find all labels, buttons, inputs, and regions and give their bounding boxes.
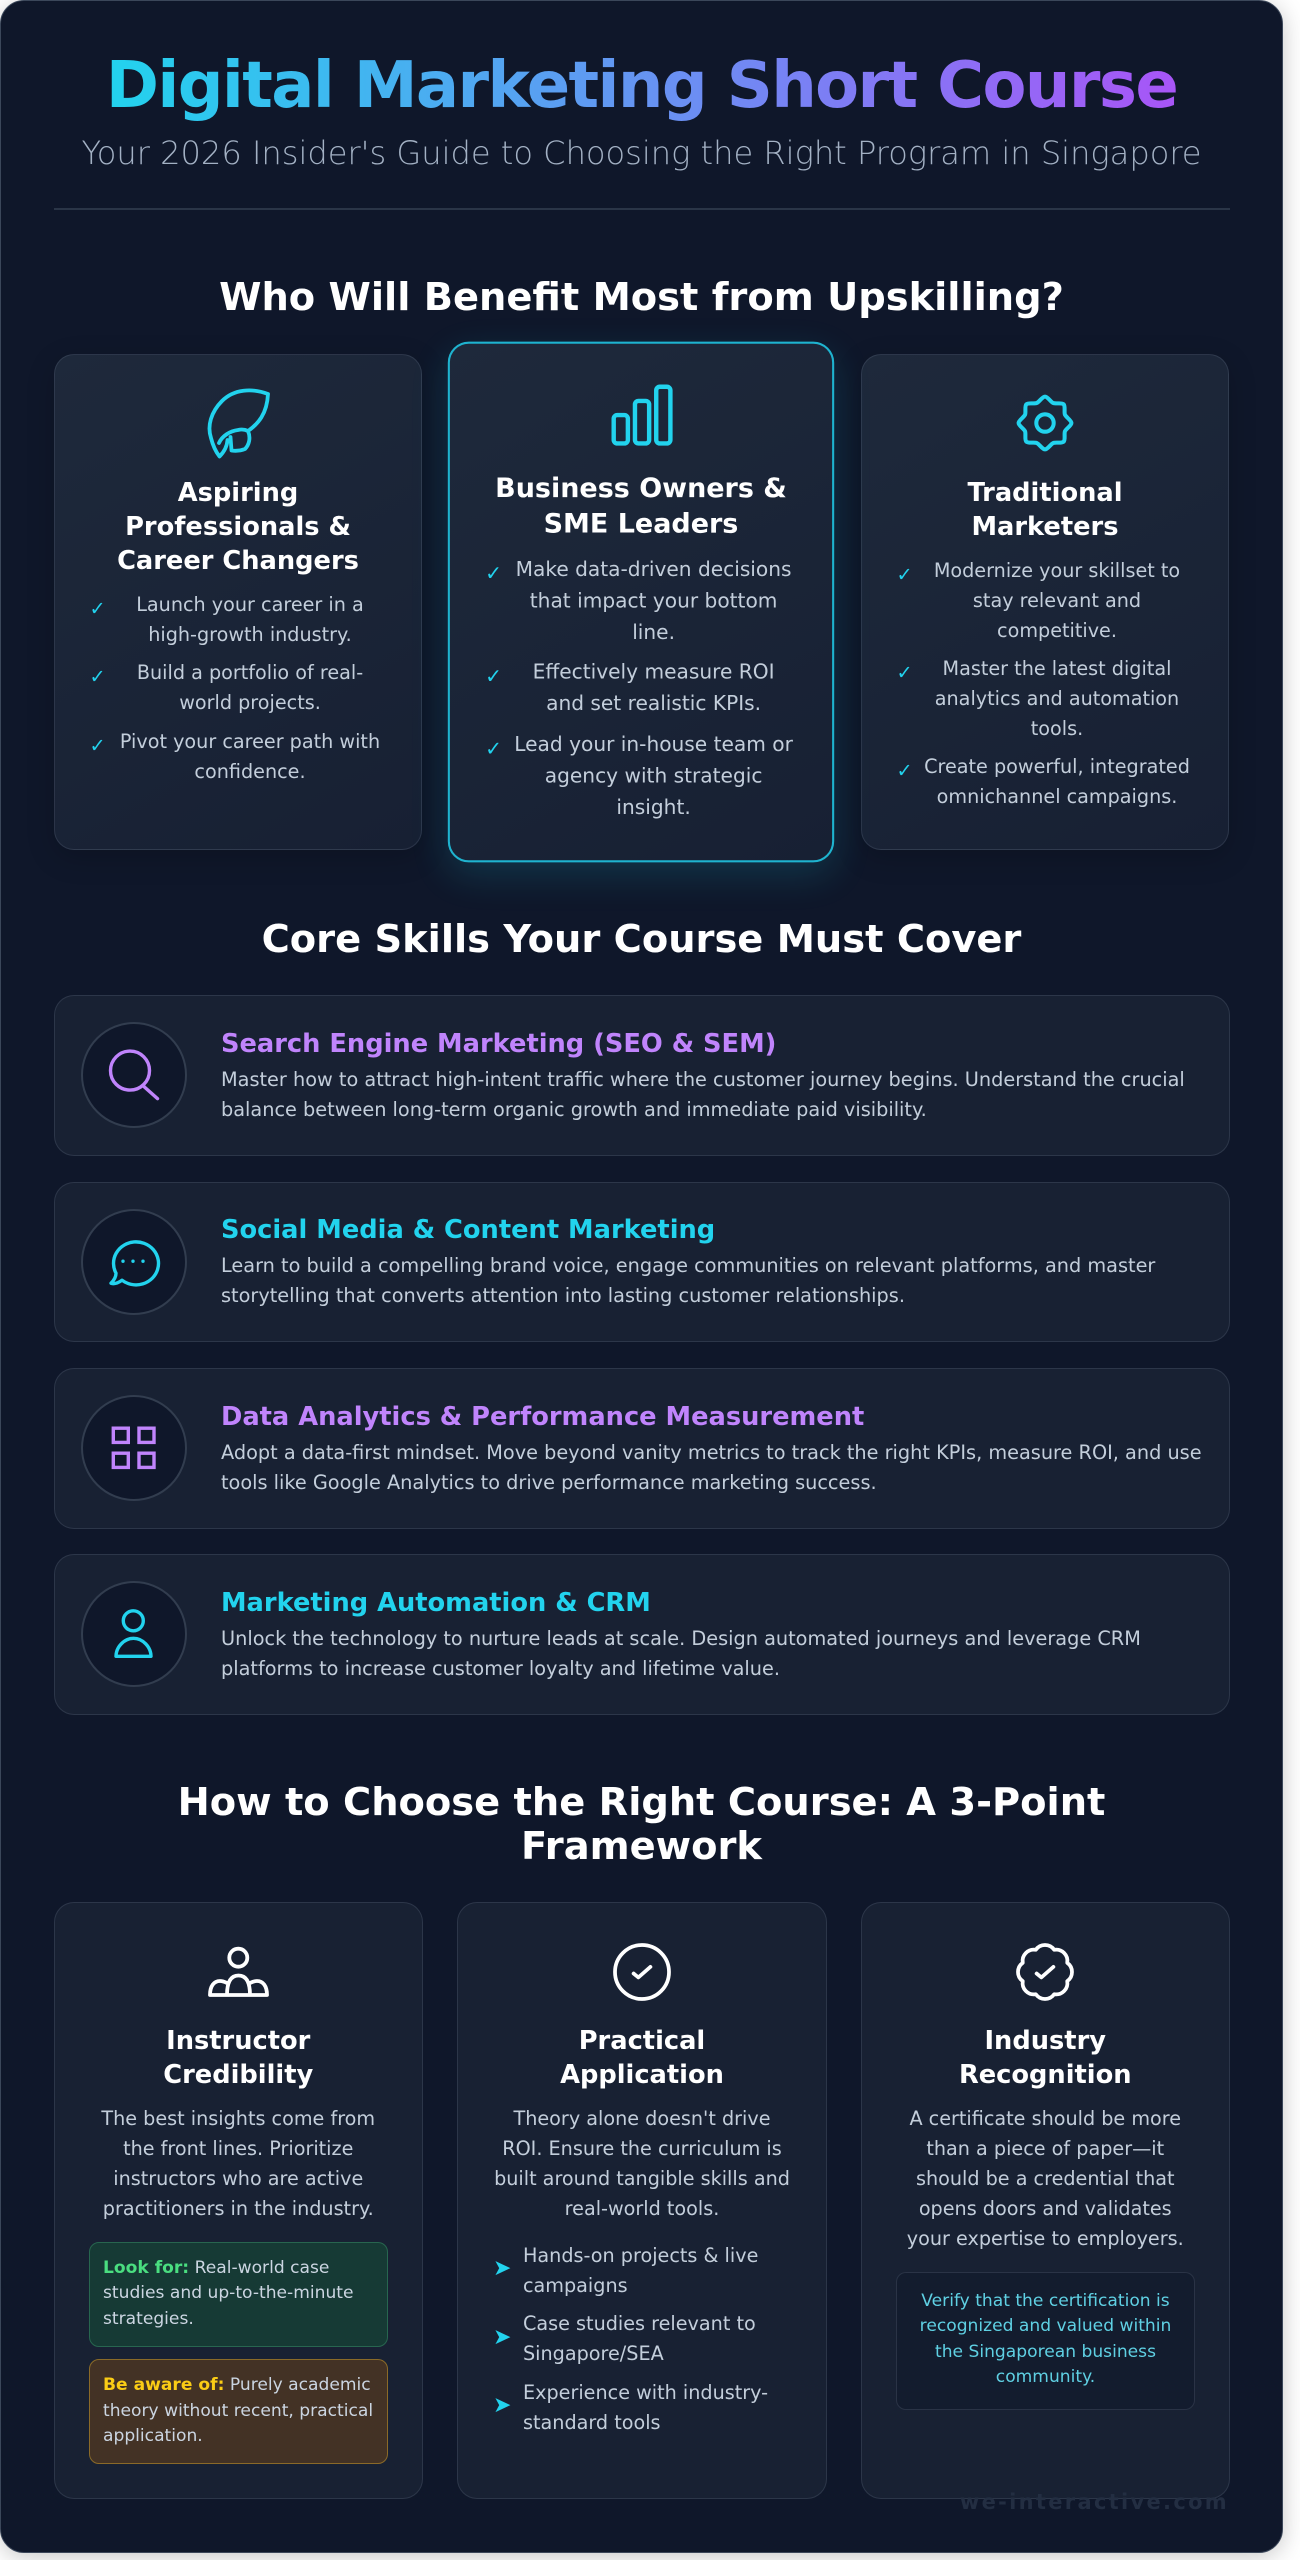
benefit list: Lead your in-house team or bbox=[514, 732, 793, 756]
card heading: Industry bbox=[984, 2026, 1106, 2056]
icon: check circle bbox=[613, 1943, 671, 2001]
benefit list: Master the latest digital bbox=[943, 657, 1171, 680]
benefit list: ✓ bbox=[90, 665, 106, 688]
panel: business owners (highlighted) bbox=[448, 342, 834, 862]
icon: group of people bbox=[208, 1946, 269, 1997]
heading: who will benefit: Who Will Benefit Most from Upskilling? bbox=[219, 275, 1064, 320]
title: Digital Marketing Short Course bbox=[106, 49, 1177, 123]
callout: look for: strategies. bbox=[103, 2309, 194, 2329]
card text: ROI. Ensure the curriculum is bbox=[502, 2136, 782, 2160]
benefit list bbox=[90, 593, 380, 783]
skill title: Search Engine Marketing (SEO & SEM) bbox=[221, 1029, 776, 1059]
benefit list: Pivot your career path with bbox=[120, 730, 380, 753]
card text bbox=[862, 2104, 1228, 2254]
callout: verify certification: recognized and valued within bbox=[920, 2316, 1171, 2336]
skill title: Social Media & Content Marketing bbox=[221, 1215, 715, 1245]
benefit list: ✓ bbox=[896, 759, 913, 782]
arrow list: ➤ bbox=[493, 2256, 511, 2281]
benefit list: high-growth industry. bbox=[148, 623, 352, 646]
callout: look for bbox=[89, 2242, 388, 2346]
skill description bbox=[221, 1068, 1185, 1121]
icon: chat bubble bbox=[81, 1209, 187, 1315]
card text: real-world tools. bbox=[565, 2196, 719, 2220]
callout: look for: studies and up-to-the-minute bbox=[103, 2283, 354, 2303]
card heading: Credibility bbox=[163, 2060, 313, 2090]
card text bbox=[494, 2106, 790, 2220]
skill description bbox=[221, 1254, 1156, 1307]
benefit list: insight. bbox=[616, 795, 691, 819]
icon: magnifier bbox=[81, 1022, 187, 1128]
arrow list bbox=[493, 2244, 768, 2434]
card text: A certificate should be more bbox=[909, 2106, 1181, 2130]
subtitle: Your 2026 Insider's Guide to Choosing the Right Program in Singapore bbox=[81, 134, 1202, 172]
card heading: Application bbox=[560, 2060, 724, 2090]
arrow list: ➤ bbox=[493, 2325, 511, 2350]
benefit list: ✓ bbox=[485, 561, 502, 585]
arrow list: Singapore/SEA bbox=[523, 2342, 664, 2365]
card text: The best insights come from bbox=[101, 2106, 375, 2130]
panel: automation skill bbox=[54, 1554, 1230, 1715]
callout: be aware of: application. bbox=[103, 2426, 203, 2446]
card heading: Business Owners & bbox=[495, 472, 787, 504]
card heading: Recognition bbox=[959, 2060, 1132, 2090]
callout: be aware of: Be aware of: Purely academic bbox=[103, 2375, 371, 2395]
benefit list: world projects. bbox=[179, 691, 321, 714]
icon: person bbox=[81, 1581, 187, 1687]
card heading bbox=[560, 2026, 724, 2090]
callout: be aware of bbox=[89, 2359, 388, 2464]
benefit list: that impact your bottom bbox=[530, 588, 777, 612]
panel: traditional marketers bbox=[861, 354, 1229, 850]
arrow list: Hands-on projects & live bbox=[523, 2244, 758, 2267]
icon: leaf bbox=[208, 388, 270, 458]
benefit list: ✓ bbox=[896, 562, 913, 586]
card heading: Aspiring bbox=[178, 478, 298, 508]
benefit list: Launch your career in a bbox=[136, 593, 364, 616]
benefit list: analytics and automation bbox=[935, 687, 1179, 710]
card heading: SME Leaders bbox=[544, 508, 738, 540]
card heading bbox=[117, 478, 359, 576]
arrow list: Case studies relevant to bbox=[523, 2312, 756, 2335]
benefit list: and set realistic KPIs. bbox=[546, 692, 761, 716]
card text: than a piece of paper—it bbox=[926, 2136, 1164, 2160]
callout: verify certification: the Singaporean business bbox=[935, 2342, 1156, 2362]
benefit list: Build a portfolio of real- bbox=[137, 661, 363, 684]
benefit list bbox=[485, 557, 793, 819]
panel: SEM skill bbox=[54, 995, 1230, 1156]
card heading bbox=[495, 472, 787, 540]
card text: built around tangible skills and bbox=[494, 2166, 790, 2190]
callout: be aware of: theory without recent, practical bbox=[103, 2401, 373, 2421]
arrow list: campaigns bbox=[523, 2274, 628, 2297]
heading: framework bbox=[178, 1780, 1105, 1869]
panel: practical application bbox=[457, 1902, 827, 2499]
card heading: Marketers bbox=[971, 512, 1119, 542]
benefit list: Modernize your skillset to bbox=[934, 558, 1180, 582]
benefit list: ✓ bbox=[485, 664, 502, 689]
icon: gear bbox=[1016, 394, 1074, 452]
panel: aspiring professionals bbox=[54, 354, 422, 850]
benefit list: confidence. bbox=[194, 760, 306, 783]
panel: instructor credibility bbox=[54, 1902, 422, 2499]
arrow list: Experience with industry- bbox=[523, 2381, 768, 2404]
card text: Theory alone doesn't drive bbox=[514, 2106, 770, 2130]
benefit list: agency with strategic bbox=[545, 763, 762, 788]
skill description: Master how to attract high-intent traffic where the customer journey begins. Understand the crucial bbox=[221, 1068, 1185, 1091]
heading: core skills: Core Skills Your Course Must Cover bbox=[262, 917, 1021, 962]
callout: verify certification bbox=[896, 2272, 1195, 2410]
card heading: Instructor bbox=[166, 2026, 310, 2056]
benefit list: stay relevant and bbox=[973, 588, 1141, 612]
benefit list: ✓ bbox=[90, 734, 106, 757]
icon: check badge bbox=[1016, 1943, 1074, 2001]
card heading: Professionals & bbox=[125, 512, 351, 542]
heading: framework: Framework bbox=[521, 1824, 762, 1869]
skill description bbox=[221, 1441, 1202, 1494]
skill description: tools like Google Analytics to drive performance marketing success. bbox=[221, 1471, 877, 1494]
skill description: balance between long-term organic growth and immediate paid visibility. bbox=[221, 1098, 927, 1121]
callout: verify certification: community. bbox=[996, 2367, 1095, 2387]
card heading bbox=[163, 2026, 313, 2090]
callout: look for: Look for: Real-world case bbox=[103, 2258, 329, 2278]
skill description: Learn to build a compelling brand voice, engage communities on relevant platforms, and master bbox=[221, 1254, 1155, 1277]
benefit list: ✓ bbox=[485, 736, 502, 760]
benefit list: line. bbox=[632, 620, 675, 644]
skill title: Data Analytics & Performance Measurement bbox=[221, 1402, 864, 1432]
card text: the front lines. Prioritize bbox=[123, 2136, 353, 2160]
arrow list: standard tools bbox=[523, 2411, 661, 2434]
card heading: Career Changers bbox=[117, 546, 359, 576]
card heading bbox=[967, 478, 1123, 542]
skill title: Marketing Automation & CRM bbox=[221, 1588, 651, 1618]
benefit list bbox=[896, 558, 1190, 808]
benefit list: Create powerful, integrated bbox=[924, 755, 1190, 778]
heading: framework: How to Choose the Right Course: A 3-Point bbox=[178, 1780, 1105, 1825]
skill description: storytelling that converts attention into lasting customer relationships. bbox=[221, 1284, 905, 1307]
panel: social media skill bbox=[54, 1182, 1230, 1342]
skill description bbox=[221, 1627, 1141, 1680]
card text: your expertise to employers. bbox=[907, 2226, 1184, 2250]
benefit list: Make data-driven decisions bbox=[516, 557, 792, 581]
benefit list: omnichannel campaigns. bbox=[937, 785, 1177, 808]
skill description: Unlock the technology to nurture leads at scale. Design automated journeys and leverage CRM bbox=[221, 1627, 1141, 1650]
panel: analytics skill bbox=[54, 1368, 1230, 1529]
card text bbox=[101, 2106, 375, 2220]
watermark: we-interactive.com bbox=[960, 2490, 1229, 2514]
benefit list: Effectively measure ROI bbox=[533, 660, 775, 684]
icon: bar chart bbox=[612, 384, 673, 446]
card text: should be a credential that bbox=[916, 2166, 1175, 2190]
skill description: platforms to increase customer loyalty and lifetime value. bbox=[221, 1657, 780, 1680]
card text: instructors who are active bbox=[113, 2166, 363, 2190]
card heading: Traditional bbox=[967, 478, 1123, 508]
benefit list: ✓ bbox=[90, 597, 106, 620]
card text: practitioners in the industry. bbox=[103, 2196, 374, 2220]
arrow list: ➤ bbox=[493, 2393, 511, 2418]
benefit list: ✓ bbox=[896, 661, 913, 684]
callout: verify certification: Verify that the certification is bbox=[921, 2291, 1170, 2311]
card text: opens doors and validates bbox=[919, 2196, 1172, 2220]
icon: grid bbox=[81, 1395, 187, 1501]
panel: industry recognition bbox=[861, 1902, 1230, 2499]
card heading bbox=[959, 2026, 1132, 2090]
card heading: Practical bbox=[579, 2026, 705, 2056]
benefit list: tools. bbox=[1031, 717, 1083, 740]
benefit list: competitive. bbox=[997, 618, 1117, 642]
skill description: Adopt a data-first mindset. Move beyond vanity metrics to track the right KPIs, measure ROI, and use bbox=[221, 1441, 1202, 1464]
